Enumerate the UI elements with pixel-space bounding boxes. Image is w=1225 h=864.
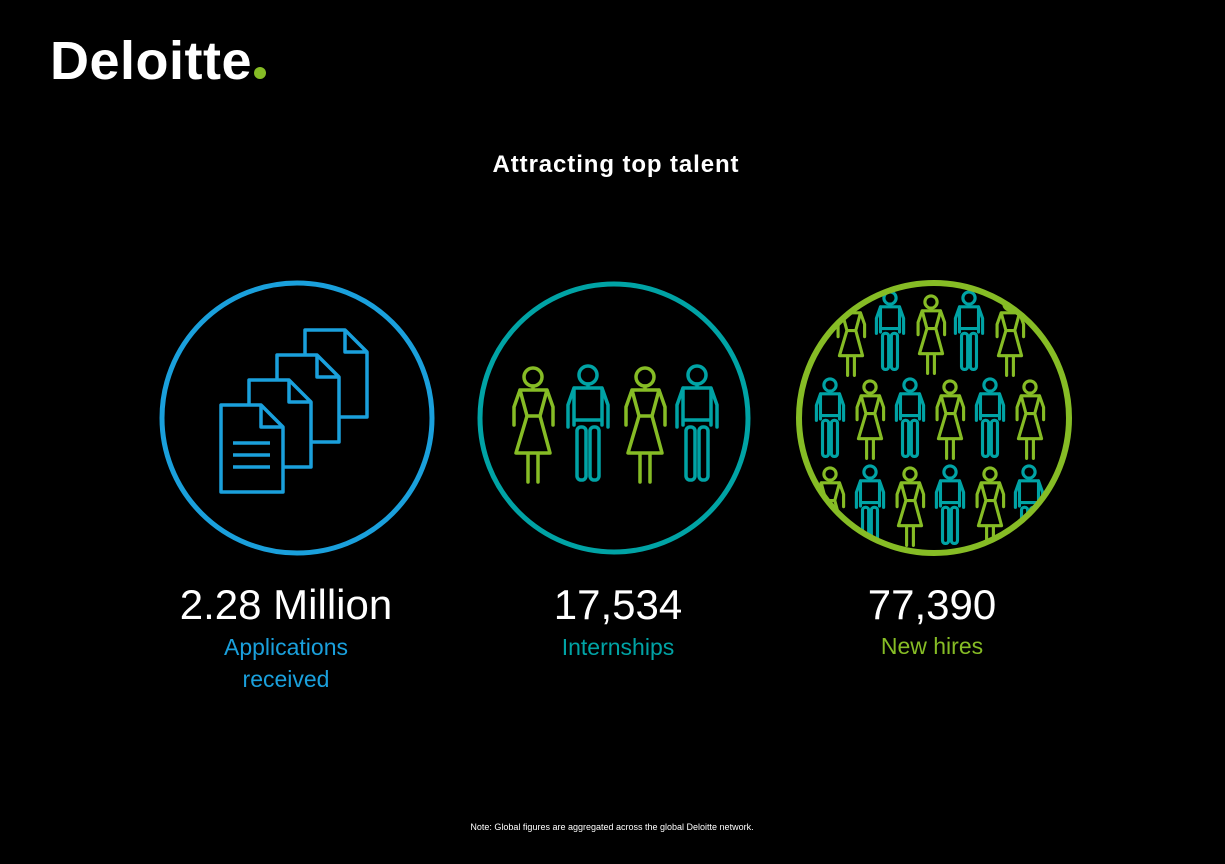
stat: new hires: 77,390 [868,581,996,628]
stat: new hires: New hires [881,633,983,659]
stat: applications: Applications [224,634,348,660]
stat: applications: 2.28 Million [180,581,392,628]
logo: Deloitte [50,31,252,91]
icon: applications circle [162,283,432,553]
title: Attracting top talent [493,151,739,178]
stat: internships [554,581,682,660]
icon: internships circle [480,284,748,552]
footnote: Note: Global figures are aggregated across the global Deloitte network. [470,822,754,832]
stat: internships: Internships [562,634,674,660]
icon: new hires circle [799,283,1069,553]
stat: applications [180,581,392,692]
icons graphic [160,280,1072,556]
stat: new hires [868,581,996,659]
stat: applications: received [243,666,329,692]
stat: internships: 17,534 [554,581,682,628]
